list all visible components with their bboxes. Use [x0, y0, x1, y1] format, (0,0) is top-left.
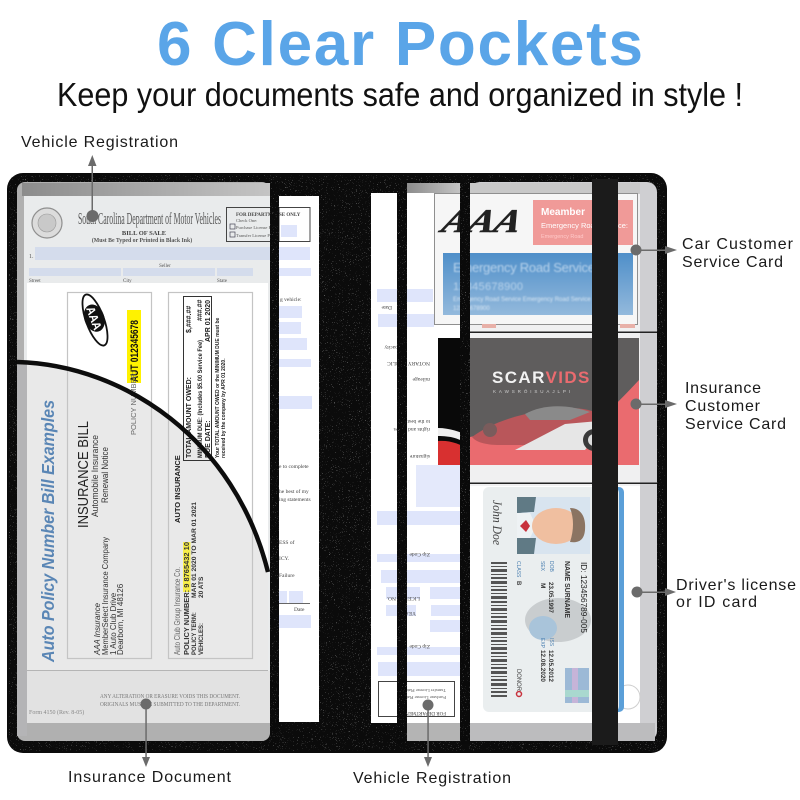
bill of sale header: City [123, 279, 132, 284]
department use box: FOR DEPARTMENT [236, 213, 283, 218]
bill of sale header: 1. [29, 254, 34, 260]
label: vehicle registration bottom [353, 700, 511, 787]
card: AAA policy [68, 291, 152, 658]
card: driver's license: M [539, 583, 546, 588]
card: auto insurance: AUTO INSURANCE [173, 455, 182, 523]
form footer: ORIGINALS MUST BE SUBMITTED TO THE DEPARTMENT. [100, 701, 240, 708]
label: insurance customer service card: Insurance [685, 380, 761, 397]
label: insurance customer service card: Customer [685, 398, 761, 415]
panel: upside-down document sheet: to the best of [401, 418, 430, 425]
card: auto insurance: MINIMUM DUE: (Includes $5.00 Service Fee) [198, 340, 204, 458]
bill of sale header: BILL OF SALE [122, 230, 166, 237]
card: driver's license: DOB [548, 561, 554, 572]
card: driver's license: ISS [548, 638, 554, 647]
AAA logo: AAA [83, 305, 105, 332]
panel: left loose sheet: ing statements [279, 497, 311, 503]
emergency box: Emergency Road Service [453, 260, 595, 275]
AAA logo [76, 291, 114, 349]
card: driver's license: 23.05.1997 [547, 582, 554, 613]
member box: Meamber [541, 206, 585, 218]
subtitle: Keep your documents safe and organized in style ! [57, 76, 743, 113]
member box [533, 200, 633, 245]
emergency box: 12345678900 [453, 281, 523, 293]
panel: upside-down document sheet: LICENSE NO. [386, 595, 420, 601]
panel: left loose sheet: SE ONLY [279, 213, 301, 218]
bill of sale header [29, 208, 270, 284]
card: auto insurance: MAR 01 2020 TO MAR 01 2021 [191, 502, 198, 598]
card: insurance customer service: SCARVIDS [492, 368, 591, 387]
panel: upside-down document sheet: Transfer License Plate [406, 688, 446, 693]
card: auto insurance: DUE DATE: [205, 420, 212, 458]
panel: upside-down document sheet: YEAR [401, 610, 416, 616]
department use box: Check One: [236, 218, 257, 223]
panel: upside-down document sheet: Date [381, 304, 392, 310]
arrow: to insurance document [140, 698, 152, 767]
panel: left loose sheet: Failure [279, 573, 295, 579]
panel: upside-down document sheet: Zip Code [409, 643, 430, 649]
form footer: Form 4150 (Rev. 8-05) [29, 709, 84, 716]
arrow: to license [632, 586, 676, 598]
card: driver's license: John Doe [490, 500, 505, 545]
form footer: ANY ALTERATION OR ERASURE VOIDS THIS DOCUMENT. [100, 693, 240, 700]
card: driver's license: DONOR [515, 669, 521, 692]
pocket curved edge [17, 362, 268, 736]
card: auto insurance: $,###.## [186, 306, 193, 333]
emergency box: Emergency Road Service Emergency Road Service [453, 297, 591, 303]
member box: Emergency Road Service: [541, 221, 628, 230]
card: auto insurance: Auto Club Group Insurance Co. [173, 567, 182, 655]
panel: upside-down document sheet: signature [409, 453, 430, 459]
arrow: to bill of sale [86, 155, 98, 222]
card: auto insurance: POLICY NUMBER: 9 8765432 10 [182, 542, 191, 655]
panel: right pocket stack [470, 182, 657, 741]
panel: upside-down document sheet: rights and duties [394, 426, 430, 432]
panel: upside-down document sheet: Zip Code [409, 551, 430, 557]
wallet cover [7, 173, 667, 753]
card: driver's license [483, 487, 624, 712]
card: AAA policy: 1 Auto Club Drive [109, 592, 118, 655]
card: insurance customer service [438, 338, 639, 465]
portrait [517, 497, 590, 554]
bill of sale header: Seller [159, 264, 171, 269]
card: auto insurance: received by the company by APR 01 2020. [221, 358, 227, 458]
card: auto insurance: APR 01 2020 [205, 300, 212, 342]
panel: left loose sheet: ICY. [279, 556, 290, 562]
label: vehicle registration bottom: Vehicle Registration [353, 770, 511, 787]
arrow: to insurance card [630, 398, 677, 410]
barcode [491, 562, 507, 697]
card: auto insurance: Your TOTAL AMOUNT OWED or the MINIMUM DUE must be [215, 318, 221, 458]
label: driver's license or ID card: or ID card [676, 594, 757, 611]
card: driver's license: 12.08.2020 [539, 650, 546, 682]
bill of sale header: State [217, 279, 228, 284]
panel: left loose sheet: he best of my [279, 488, 309, 495]
member box: Emergency Road [541, 234, 584, 240]
card: driver's license: B [515, 581, 521, 586]
card: car customer service [434, 194, 638, 328]
card: AAA policy: AAA Insurance [92, 603, 102, 656]
label: insurance document [68, 698, 232, 786]
emergency box [443, 253, 633, 315]
card: driver's license: NAME SURNAME [563, 561, 572, 618]
pocket dividers [470, 332, 657, 484]
card: AAA policy: INSURANCE BILL [75, 421, 92, 528]
panel: upside-down document sheet: FOR DEPARTMENT [402, 710, 446, 715]
label: insurance customer service card: Service Card [685, 416, 786, 433]
elastic band [592, 179, 618, 745]
card: auto insurance: VEHICLES: [199, 623, 205, 655]
panel: upside-down document sheet: mileage [412, 376, 430, 382]
form footer [24, 671, 270, 723]
card: AAA policy: AUT 012345678 [129, 320, 141, 382]
panel: left loose sheet: g vehicle: [280, 297, 302, 303]
card: driver's license: 12.05.2012 [547, 650, 554, 682]
panel: left top document pocket [17, 182, 283, 741]
label: insurance document: Insurance Document [68, 769, 232, 786]
panel: left loose sheet: Date [294, 607, 305, 613]
label: car customer service card: Service Card [682, 254, 783, 271]
bill of sale header: (Must Be Typed or Printed in Black Ink) [92, 237, 192, 244]
hologram [565, 668, 589, 703]
bill of sale header: South Carolina Department of Motor Vehicles [78, 209, 221, 228]
label: car customer service card [630, 236, 794, 271]
card: AAA policy: POLICY NUMBER: [129, 371, 138, 435]
strip: center pocket edge [397, 182, 407, 744]
card: AAA policy: MemberSelect Insurance Company [100, 536, 110, 655]
panel: upside-down document sheet: NOTARY PUBLIC [387, 360, 430, 366]
card: insurance customer service: KAWSRÖISUAJLPI [493, 388, 573, 394]
card: driver's license: CLASS [515, 561, 521, 578]
car illustration [472, 406, 618, 451]
card: AAA policy: Automobile Insurance [90, 435, 101, 517]
emergency box: 12345678900 [453, 306, 490, 312]
panel: upside-down document sheet: Purchase License Plate [405, 695, 446, 700]
strip: right pocket edge [460, 182, 470, 744]
bill of sale header: Street [29, 279, 41, 284]
label: car customer service card: Car Customer [682, 236, 794, 253]
department use box: Transfer License Plate [236, 233, 276, 238]
panel: left loose sheet: ESS of [279, 539, 295, 546]
AAA script logo: AAA [435, 204, 527, 240]
panel: left loose sheet: e to complete [279, 464, 309, 470]
card: driver's license: EXP [539, 638, 545, 649]
card: auto insurance: POLICY TERM: [192, 612, 198, 655]
card: auto insurance: ###.## [197, 299, 204, 321]
label: driver's license or ID card: Driver's license [676, 577, 796, 594]
card: auto insurance: TOTAL AMOUNT OWED: [186, 377, 193, 458]
label: vehicle registration top [21, 134, 178, 222]
card: AAA policy: Renewal Notice [100, 447, 111, 503]
card: driver's license: ID: 123456789-005 [579, 562, 589, 633]
label: vehicle registration top: Vehicle Registration [21, 134, 178, 151]
title: 6 Clear Pockets [157, 10, 643, 79]
card: auto insurance [168, 292, 252, 658]
panel: left loose sheet [279, 196, 319, 722]
arrow: to registration sheet [422, 700, 434, 767]
card: auto insurance: 20 ATS [198, 576, 205, 598]
panel: upside-down document sheet: incapacity [384, 344, 407, 350]
card: driver's license: SEX [539, 561, 545, 572]
card: AAA policy: Dearborn, MI 48126 [116, 583, 125, 655]
arrow: to AAA card [630, 244, 677, 256]
label: insurance customer service card [630, 380, 786, 433]
label: driver's license or ID card [632, 577, 796, 611]
department use box: Purchase License Plate [236, 225, 277, 230]
insurance insert [27, 283, 268, 671]
wallet [7, 173, 667, 753]
vertical heading: Auto Policy Number Bill Examples [38, 400, 58, 663]
department use box [226, 208, 283, 242]
strip: left elastic edge [270, 180, 279, 746]
panel: upside-down document sheet [371, 183, 640, 741]
